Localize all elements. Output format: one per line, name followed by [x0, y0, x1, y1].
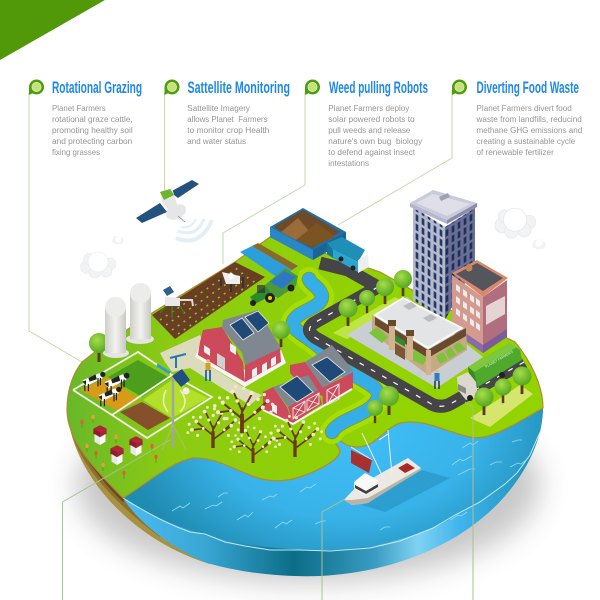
weather station [157, 354, 190, 450]
icon: speech bubble [164, 80, 180, 95]
water surface [123, 400, 543, 550]
hull [344, 458, 421, 505]
front roof [273, 375, 318, 407]
back solar panels [312, 357, 345, 382]
trees by river [272, 321, 399, 423]
barn 1 [195, 310, 286, 387]
front right wall [428, 328, 467, 375]
icon: signal waves [176, 219, 212, 241]
silo right [126, 283, 154, 344]
compost bin [270, 208, 346, 260]
connector lines [29, 92, 452, 362]
weeding robot 2 [221, 272, 243, 292]
front wall [288, 390, 322, 423]
cloud: right [495, 208, 536, 238]
text block: pull weeds and release [328, 125, 411, 135]
lawn: light strip right [470, 385, 533, 427]
text block: and protecting carbon [52, 136, 133, 146]
heading: Sattellite Monitoring [188, 79, 290, 97]
paddocks [73, 352, 212, 438]
road [309, 263, 524, 406]
recycling truck [327, 237, 369, 273]
farmer [206, 359, 210, 381]
heading: Weed pulling Robots [329, 79, 428, 97]
text block: Planet Farmers [52, 103, 106, 113]
irrigation channel [240, 246, 292, 278]
solar panels [230, 318, 254, 340]
column: Sattellite Monitoring [164, 79, 290, 146]
back section wall [322, 372, 353, 405]
beige farm path [160, 335, 262, 405]
fishing boat [344, 430, 450, 512]
cows [82, 372, 130, 406]
columns [389, 324, 431, 375]
boat shadow [362, 470, 450, 512]
land [67, 237, 543, 498]
connector lines lower [62, 402, 473, 600]
text block: promoting healthy soil [52, 125, 133, 135]
roof units [403, 302, 417, 310]
text block: solar powered robots to [328, 114, 415, 124]
text block: to defend against insect [328, 147, 416, 157]
brick building [452, 260, 508, 353]
barn 2 [263, 345, 353, 424]
text block: Planet Farmers divert food [476, 103, 572, 113]
lawn: strip beside shop [333, 297, 407, 339]
tree near silos [89, 333, 109, 362]
trees along the road [338, 270, 412, 326]
delivery truck [457, 343, 522, 401]
column: Diverting Food Waste [452, 79, 582, 157]
trees right [474, 366, 532, 415]
grass pen [108, 360, 170, 397]
weeding robot 1 [160, 286, 193, 318]
text block: of renewable fertilizer [476, 147, 554, 157]
heading: Rotational Grazing [52, 79, 142, 97]
text block: Planet Farmers deploy [328, 103, 410, 113]
front solar panels [280, 376, 313, 402]
bee hives [93, 425, 143, 465]
island base [67, 400, 543, 576]
text block: allows Planet Farmers [187, 114, 268, 124]
waves [172, 440, 526, 530]
text block: nature's own bug biology [328, 136, 423, 146]
front left wall [372, 315, 428, 375]
text block: to monitor crop Health [187, 125, 270, 135]
front gable [263, 387, 293, 423]
person near shop [434, 369, 440, 389]
green corner triangle [0, 0, 105, 60]
icon: speech bubble [452, 80, 467, 95]
water rim wave [123, 430, 541, 551]
cloud: small right [532, 239, 546, 249]
text block: methane GHG emissions and [476, 125, 582, 135]
shop pavement [347, 297, 483, 388]
barn door [217, 353, 225, 370]
masts [351, 430, 392, 475]
meadow pen [143, 380, 208, 418]
cloud: left [80, 252, 116, 278]
shop building [369, 298, 467, 375]
barn 2 base [263, 389, 352, 424]
silo left [103, 297, 129, 358]
cloud: small left [112, 236, 124, 244]
water side [123, 408, 543, 576]
text block [476, 103, 582, 157]
awnings [369, 327, 466, 365]
shop sign [395, 335, 405, 347]
column: Weed pulling Robots [305, 79, 428, 168]
barn gable [198, 327, 245, 382]
text block: Sattellite Imagery [187, 103, 251, 113]
text block: and water status [187, 136, 246, 146]
text block [52, 103, 133, 157]
pile left [281, 218, 310, 240]
text block: waste from landfills, reducind [476, 114, 582, 124]
barn side wall [245, 348, 281, 382]
back gable [290, 362, 325, 396]
disc shadow [76, 387, 540, 583]
blossom trees [186, 385, 323, 463]
text block [187, 103, 270, 146]
deck hold [398, 463, 415, 473]
fences [73, 352, 212, 438]
soil layer: tan [67, 405, 170, 537]
icon: speech bubble [29, 80, 44, 95]
door x [327, 384, 339, 405]
net [351, 450, 372, 473]
pile right [296, 223, 335, 247]
tractor with trailer [250, 268, 298, 306]
crop field [152, 262, 265, 339]
text block [328, 103, 423, 168]
back roof [305, 345, 353, 388]
barn base [195, 348, 286, 387]
icon: satellite [136, 180, 199, 223]
soil layer: brown [67, 405, 140, 502]
barn roof [222, 310, 281, 365]
text block: creating a sustainable cycle [476, 136, 575, 146]
river [293, 279, 378, 432]
channel bank [252, 243, 298, 270]
tulips [80, 415, 158, 479]
icon: speech bubble [305, 80, 320, 95]
column caps [388, 320, 414, 336]
delivery truck: PLANET FARMERS [484, 349, 514, 369]
flat roof [375, 298, 462, 348]
cabin [354, 473, 378, 495]
cow pen [80, 377, 140, 411]
column: Rotational Grazing [29, 79, 142, 157]
office tower [410, 190, 477, 320]
text block: rotational graze cattle, [52, 114, 133, 124]
text block: intestations [328, 158, 369, 168]
soil layer: olive [67, 405, 240, 564]
text block: fixing grasses [52, 147, 100, 157]
silos [103, 283, 154, 358]
dirt pen [120, 402, 170, 430]
shop door [395, 343, 405, 360]
